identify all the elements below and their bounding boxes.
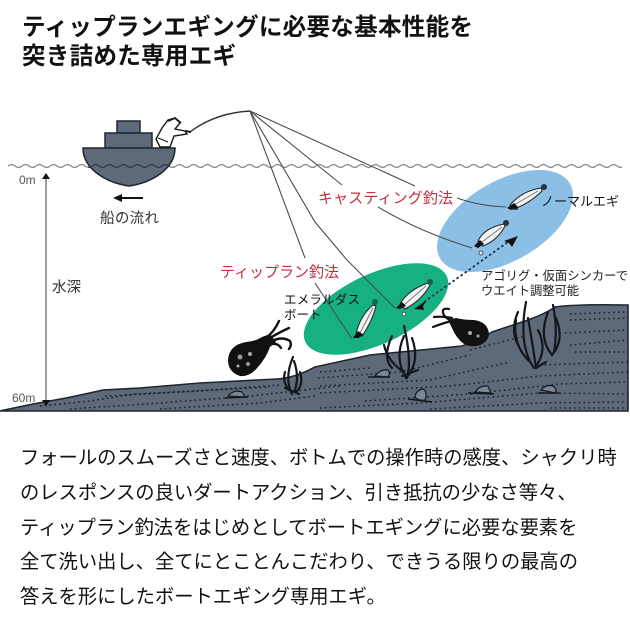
squid: left: [228, 321, 291, 376]
fishing lines: [250, 111, 506, 339]
body text: 答えを形にしたボートエギング専用エギ。: [20, 586, 386, 608]
ellipse: emeraldas boat zone: [291, 244, 461, 374]
squid: right: [433, 309, 489, 346]
arrow: weight adjustment dotted: [414, 236, 518, 310]
water surface line: [8, 162, 622, 170]
label: tip run: ティップラン釣法: [220, 264, 339, 281]
depth label: 水深: [52, 279, 81, 296]
label: boat drift: 船の流れ: [100, 210, 160, 227]
arrow: boat drift: [113, 194, 143, 202]
body text: [20, 447, 617, 608]
label: emeraldas: [284, 292, 360, 322]
label: weight adjustment: [481, 268, 628, 298]
label: normal egi: ノーマルエギ: [541, 194, 619, 209]
body text: ティップラン釣法をはじめとしてボートエギングに必要な要素を: [20, 517, 577, 539]
label: weight adjustment: アゴリグ・仮面シンカーで: [481, 268, 628, 283]
boat: [83, 121, 175, 186]
seaweed: [284, 302, 560, 394]
fisherman and rod: [156, 111, 250, 147]
depth label 0m: 0m: [19, 173, 36, 187]
label: emeraldas: エメラルダス: [284, 292, 360, 307]
lure: green upper: [396, 279, 433, 316]
label: weight adjustment: ウエイト調整可能: [481, 283, 579, 298]
title: ティップランエギングに必要な基本性能を: [22, 13, 473, 41]
lure: green lower: [353, 299, 378, 338]
rock shadow strokes: [225, 377, 560, 402]
depth label 60m: 60m: [12, 391, 35, 405]
diagram: fishing scene: [0, 111, 628, 411]
rocks: [228, 370, 556, 400]
lure: upper normal egi: [507, 184, 547, 210]
body text: フォールのスムーズさと速度、ボトムでの操作時の感度、シャクリ時: [20, 447, 617, 469]
ellipse: normal egi zone: [420, 149, 590, 293]
seabed: [0, 305, 628, 411]
body text: のレスポンスの良いダートアクション、引き抵抗の少なさ等々、: [20, 482, 577, 504]
body text: 全て洗い出し、全てにとことんこだわり、できうる限りの最高の: [20, 551, 578, 573]
lure: lower normal egi: [474, 220, 509, 255]
title: [22, 13, 473, 70]
title: 突き詰めた専用エギ: [22, 43, 236, 70]
label: emeraldas: ボート: [284, 308, 322, 322]
depth arrow: [42, 173, 50, 406]
label: casting: キャスティング釣法: [318, 190, 453, 207]
seabed speckle dots: [40, 312, 628, 409]
